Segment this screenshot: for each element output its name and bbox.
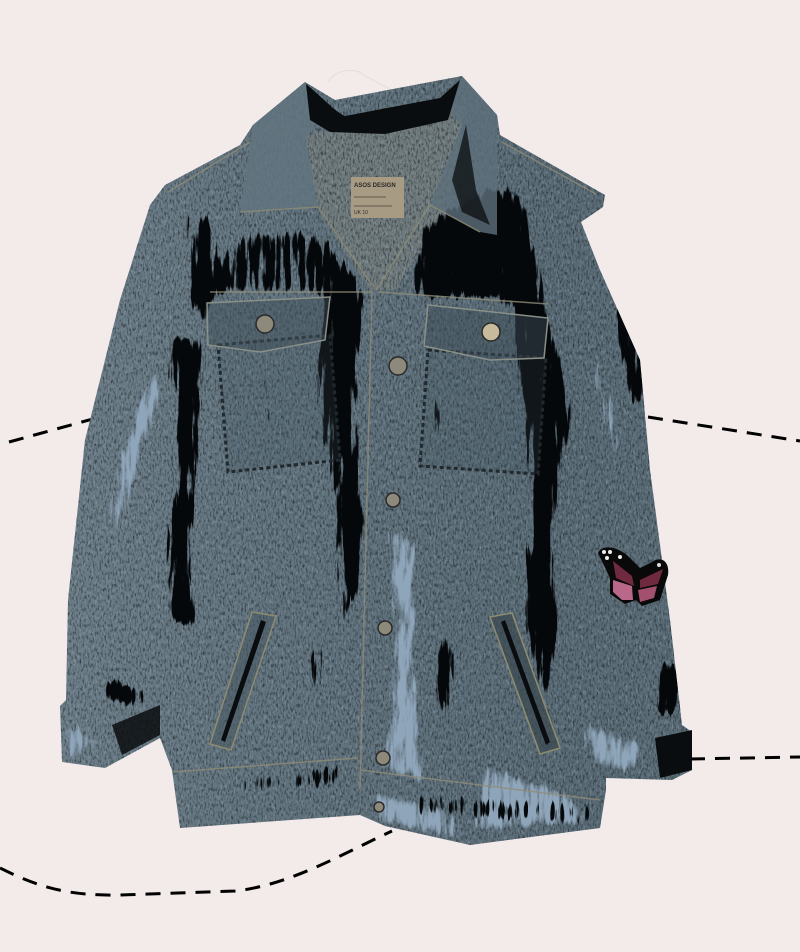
jacket inner back	[305, 105, 465, 290]
hanger thread	[328, 70, 392, 90]
jacket	[60, 70, 692, 845]
dashed line: cuff right	[690, 757, 800, 759]
welt pocket right	[490, 613, 560, 754]
dashed line: bottom curve	[0, 831, 392, 895]
welt pocket left	[210, 612, 276, 750]
collar shadow	[306, 80, 460, 134]
grain highlights	[65, 358, 641, 838]
label: ASOS DESIGN	[354, 183, 396, 189]
pocket flap right	[424, 305, 548, 360]
dashed line: left	[9, 417, 100, 442]
pocket left	[218, 335, 340, 472]
dashed line: right	[648, 417, 800, 441]
fine light grain	[60, 76, 688, 844]
collar left	[240, 82, 318, 212]
grain shadows	[100, 165, 686, 832]
buttons	[256, 315, 500, 812]
collar right streaks	[452, 125, 490, 225]
pocket right	[420, 350, 546, 474]
seam lines	[168, 142, 600, 800]
cuff right dark	[655, 730, 692, 778]
cuff left dark	[112, 705, 160, 755]
jacket silhouette fill and texture	[60, 76, 692, 845]
pocket flap left	[207, 297, 330, 352]
welt pocket right opening	[501, 620, 550, 745]
label	[351, 177, 404, 218]
fine dark grain	[60, 76, 691, 845]
label: UK 10	[354, 210, 368, 216]
butterfly patch	[598, 547, 668, 606]
collar right	[430, 76, 497, 235]
welt pocket left opening	[221, 620, 266, 742]
